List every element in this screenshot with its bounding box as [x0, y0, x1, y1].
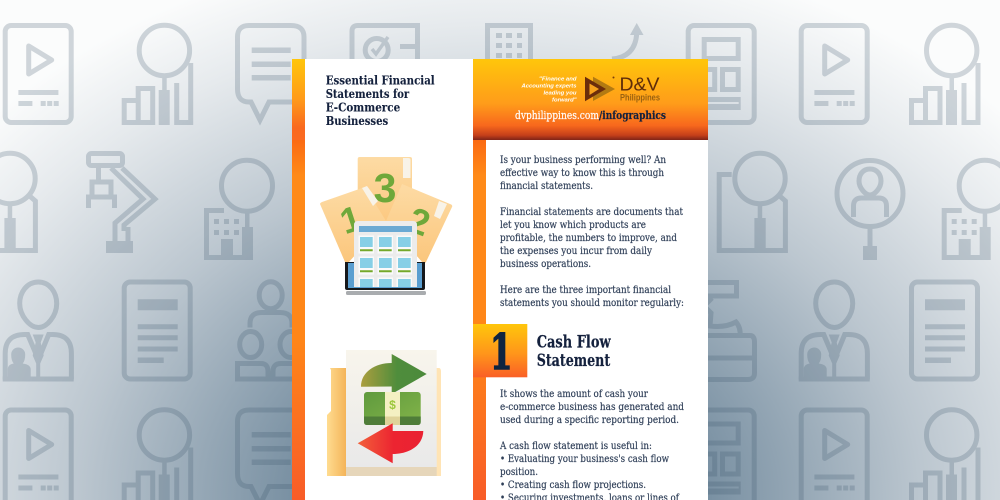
section body text: e-commerce business has generated and — [500, 401, 684, 413]
money: $ — [389, 398, 396, 412]
section body text: • Evaluating your business's cash flow — [500, 453, 669, 465]
section heading — [537, 332, 611, 370]
intro text: financial statements. — [500, 180, 593, 192]
icon: video document, row 4 — [5, 410, 71, 500]
icon: building — [488, 26, 530, 70]
intro text: business operations. — [500, 258, 591, 270]
intro text: statements you should monitor regularly: — [500, 297, 684, 309]
icon: magnifier chart, row 1 right — [912, 25, 978, 125]
title: E-Commerce — [326, 100, 400, 114]
green arrow — [361, 354, 427, 394]
infographic page preview panel — [292, 59, 708, 500]
tablet base — [345, 262, 426, 295]
icon: speech bubble, row 4 — [238, 410, 304, 500]
right body strip — [473, 140, 486, 500]
icon: group of people — [238, 282, 306, 379]
intro text: let you know which products are — [500, 219, 646, 231]
icon: building magnifier, right edge — [944, 160, 1000, 260]
logo: D&V Philippines — [585, 74, 660, 102]
section number badge: 1 — [490, 323, 512, 381]
intro text: Financial statements are documents that — [500, 206, 684, 218]
left folder 1: 1 — [335, 197, 367, 242]
intro text: effective way to know this is through — [500, 167, 664, 179]
back folder 3: 3 — [374, 165, 396, 211]
folder — [327, 368, 441, 476]
paper — [346, 350, 437, 467]
section body text — [499, 388, 684, 500]
icon: video document, row 4 right — [801, 410, 867, 500]
icon: text document, row 3 — [124, 282, 190, 379]
tagline: forward" — [552, 98, 577, 104]
intro text: profitable, the numbers to improve, and — [500, 232, 677, 244]
icon: magnifier chart, row 1 — [124, 25, 191, 125]
header band — [473, 59, 708, 140]
icon: speech bubble, row 1 — [238, 26, 304, 120]
section body text: position. — [500, 466, 538, 478]
section number badge — [473, 323, 527, 381]
icon: magnifier document, row 2 left — [0, 153, 35, 253]
website link: /infographics — [599, 108, 666, 122]
section heading: Cash Flow — [537, 332, 611, 352]
illustration: cash flow folder — [327, 350, 441, 476]
section body text: used during a specific reporting period. — [500, 414, 679, 426]
icon: text document, row 3 right — [912, 282, 978, 379]
icon: building magnifier — [206, 160, 272, 260]
intro text — [500, 154, 684, 309]
red arrow — [358, 423, 423, 463]
right folder 2: 2 — [403, 199, 436, 244]
title — [326, 72, 435, 128]
icon: person in magnifier — [837, 160, 903, 260]
spreadsheet screen — [354, 221, 417, 287]
intro text: the expenses you incur from daily — [500, 245, 652, 257]
website link: dvphilippines.com — [515, 108, 599, 122]
icon: magnifier document, row 2 right — [719, 153, 785, 253]
icon: video document, row 1 — [5, 26, 71, 122]
tagline — [520, 76, 577, 104]
logo: D&V Philippines: Philippines — [620, 92, 660, 102]
icon: person with portrait, row 3 right — [799, 282, 870, 382]
title: Essential Financial — [326, 72, 435, 88]
intro text: Is your business performing well? An — [500, 154, 666, 166]
icon: person with stacked books — [700, 282, 754, 380]
title: Statements for — [326, 86, 410, 101]
section body text: A cash flow statement is useful in: — [499, 440, 652, 452]
left body strip — [292, 140, 305, 500]
tagline: "Finance and — [539, 76, 577, 82]
left header strip — [292, 59, 305, 140]
logo: D&V Philippines: D&V — [620, 74, 660, 94]
icon: layout, row 4 — [688, 410, 754, 500]
icon: magnifier chart, row 4 — [124, 410, 191, 500]
icon: clipboard check — [352, 26, 418, 70]
title: Businesses — [326, 113, 388, 128]
icon: magnifier chart, row 4 right — [912, 410, 978, 500]
icon: growth arrow — [612, 23, 644, 59]
intro text: Here are the three important financial — [500, 284, 671, 296]
section body text: It shows the amount of cash your — [500, 388, 649, 400]
section heading: Statement — [537, 351, 610, 370]
icon: video document, row 1 right — [801, 26, 867, 122]
section body text: • Creating cash flow projections. — [500, 479, 646, 491]
icon: person with portrait, row 3 — [3, 282, 74, 382]
icon: layout, row 1 — [688, 26, 754, 122]
tagline: leading you — [544, 90, 577, 96]
illustration: three numbered statements on a tablet — [320, 157, 452, 295]
tagline: Accounting experts — [520, 84, 576, 90]
icon: robot arm — [88, 154, 155, 253]
